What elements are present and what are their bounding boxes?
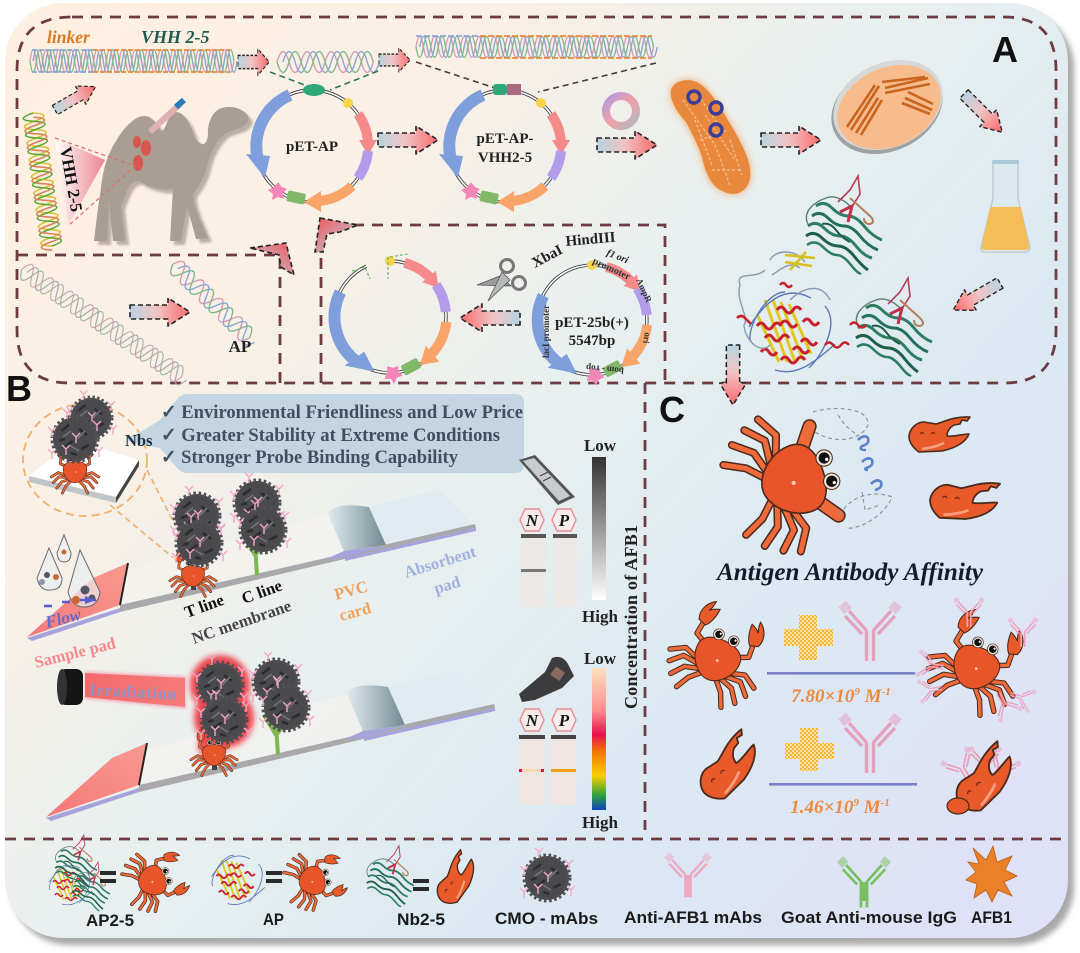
plasmid pET-AP-VHH2-5: [439, 84, 570, 212]
N and P results: thermal: N: [525, 711, 539, 730]
arrow: to panel C: [720, 345, 746, 405]
section label C: C: [659, 389, 685, 430]
thermal camera: [519, 657, 574, 702]
plasmid pET-25b: pET-25b(+): [555, 315, 629, 331]
magnified circle of T line: [23, 390, 147, 516]
test strip: visual mode: [27, 473, 476, 641]
plasmid pET-25b: promoter: [591, 256, 632, 283]
legend: AP2-5: [49, 835, 194, 930]
legend: CMO - mAbs: CMO - mAbs: [495, 910, 598, 928]
plasmid pET-25b: AmpR: [634, 277, 654, 304]
label: linker: linker: [47, 27, 90, 47]
plasmid ring icon: [606, 96, 636, 126]
guide lines to T line: [110, 470, 176, 560]
label: Sample pad: Sample pad: [32, 633, 117, 672]
test strip: photothermal mode: [46, 652, 495, 821]
plasmid pET-AP: pET-AP: [286, 139, 338, 155]
label: Absorbent pad: pad: [432, 572, 463, 598]
thermal scale bar: High: [582, 813, 618, 832]
legend: Goat Anti-mouse IgG: [781, 859, 957, 927]
section label B: B: [6, 368, 32, 409]
N and P results: thermal: P: [558, 711, 570, 730]
label: PVC card: [332, 577, 373, 625]
legend: AP2-5: AP2-5: [86, 912, 134, 930]
reaction row: whole crab: M: [860, 686, 883, 707]
plasmid pET-25b: ori: [641, 332, 653, 345]
label: T line: T line: [182, 590, 226, 622]
grayscale scale bar: High: [582, 607, 618, 626]
N and P results: visual: [520, 509, 577, 607]
insertion guide lines: [270, 62, 656, 93]
N and P results: visual: N: [525, 511, 539, 530]
box: AP gene: [17, 258, 260, 388]
label: NC membrane: NC membrane: [189, 596, 294, 648]
legend: Goat Anti-mouse IgG: Goat Anti-mouse IgG: [781, 909, 957, 927]
arrow: [597, 131, 657, 159]
bacterium: [671, 80, 750, 194]
crab with detached claws: [713, 401, 1000, 566]
legend: AFB1: AFB1: [971, 909, 1012, 927]
reaction row: claw: 1.46×10: [790, 797, 853, 818]
axis label: Concentration of AFB1: Concentration of AFB1: [621, 525, 641, 709]
AP2-5 protein structure: [737, 176, 932, 375]
callout: Nbs advantages: ✓ Environmental Friendliness and Low Price: [161, 402, 523, 423]
DNA: linker VHH strand: [30, 50, 237, 72]
box: AP gene: AP: [229, 337, 251, 356]
legend: Nb2-5: [367, 846, 484, 929]
reaction row: whole crab: [657, 592, 1039, 725]
arrow: [238, 49, 269, 75]
callout: Nbs advantages: ✓ Greater Stability at Extreme Conditions: [161, 425, 500, 446]
plasmid pET-AP-VHH2-5: VHH2-5: [478, 150, 532, 166]
reaction row: whole crab: 9: [854, 686, 860, 698]
callout: Nbs advantages: ✓ Stronger Probe Binding Capability: [161, 447, 458, 468]
plasmid cut: [307, 236, 482, 410]
N and P results: visual: P: [558, 511, 570, 530]
heading: Antigen Antibody Affinity: Antigen Antibody Affinity: [715, 559, 984, 586]
bent arrows: [250, 218, 358, 275]
legend: Anti-AFB1 mAbs: [624, 855, 762, 927]
petri dish: [816, 43, 958, 171]
label: VHH 2-5: VHH 2-5: [141, 27, 210, 47]
label: C line: C line: [239, 576, 285, 608]
arrow: [761, 126, 821, 154]
plasmid pET-AP: [246, 84, 377, 212]
arrow: [379, 48, 410, 72]
reaction row: whole crab: 7.80×10: [791, 686, 854, 707]
reaction row: claw: -1: [881, 797, 890, 809]
legend: CMO - mAbs: [495, 848, 598, 928]
label: PVC card: PVC: [332, 577, 370, 604]
plasmid pET-25b: [507, 230, 682, 411]
arrow: left: [460, 304, 520, 332]
DNA: VHH gene: [23, 112, 63, 252]
legend: AP: AP: [263, 911, 284, 929]
label: VHH 2-5 vertical: VHH 2-5: [56, 145, 86, 213]
plasmid pET-25b: XbaI: [529, 242, 566, 272]
plasmid pET-25b: lacI promoter: [541, 305, 551, 358]
legend: Nb2-5: Nb2-5: [397, 911, 445, 929]
arrow: [50, 78, 101, 119]
thermal scale bar: [582, 649, 618, 832]
arrow: [947, 273, 1006, 320]
label: Flow: Flow: [42, 605, 83, 632]
N and P results: thermal: [519, 709, 576, 805]
callout: Nbs advantages: Nbs: [125, 431, 153, 450]
arrow: [956, 86, 1011, 141]
camel with immunisation: [94, 100, 253, 245]
label: Absorbent pad: Absorbent: [402, 542, 479, 582]
reaction row: claw: M: [859, 797, 882, 818]
reaction row: whole crab: -1: [882, 686, 891, 698]
grayscale scale bar: [582, 436, 618, 626]
label: Irradiation: Irradiation: [89, 680, 177, 704]
legend: AP: [211, 845, 351, 929]
VHH magnified triangle: [55, 138, 135, 226]
reaction row: claw: 9: [853, 797, 859, 809]
legend: AFB1: [966, 846, 1017, 927]
plasmid pET-AP-VHH2-5: pET-AP-: [477, 131, 533, 147]
strip device: [519, 455, 575, 505]
plasmid pET-25b: 5547bp: [569, 333, 615, 349]
label: PVC card: card: [337, 598, 373, 625]
laser beam and lens: [57, 669, 186, 709]
plasmid pET-25b: f1 ori: [605, 248, 630, 266]
section label A: A: [992, 29, 1018, 70]
arrow: [378, 126, 438, 154]
flask: [981, 160, 1030, 252]
grayscale scale bar: Low: [584, 436, 617, 455]
callout: Nbs advantages: [125, 394, 524, 473]
plasmid pET-25b: HindIII: [565, 230, 616, 250]
DNA: AP segment: [277, 52, 379, 72]
scissors: [477, 260, 526, 301]
plasmid pET-25b: bom - rop: [586, 363, 624, 376]
thermal scale bar: Low: [584, 649, 617, 668]
reaction row: claw: [689, 716, 1024, 818]
DNA: fused strand: [416, 36, 657, 58]
legend: Anti-AFB1 mAbs: Anti-AFB1 mAbs: [624, 909, 762, 927]
